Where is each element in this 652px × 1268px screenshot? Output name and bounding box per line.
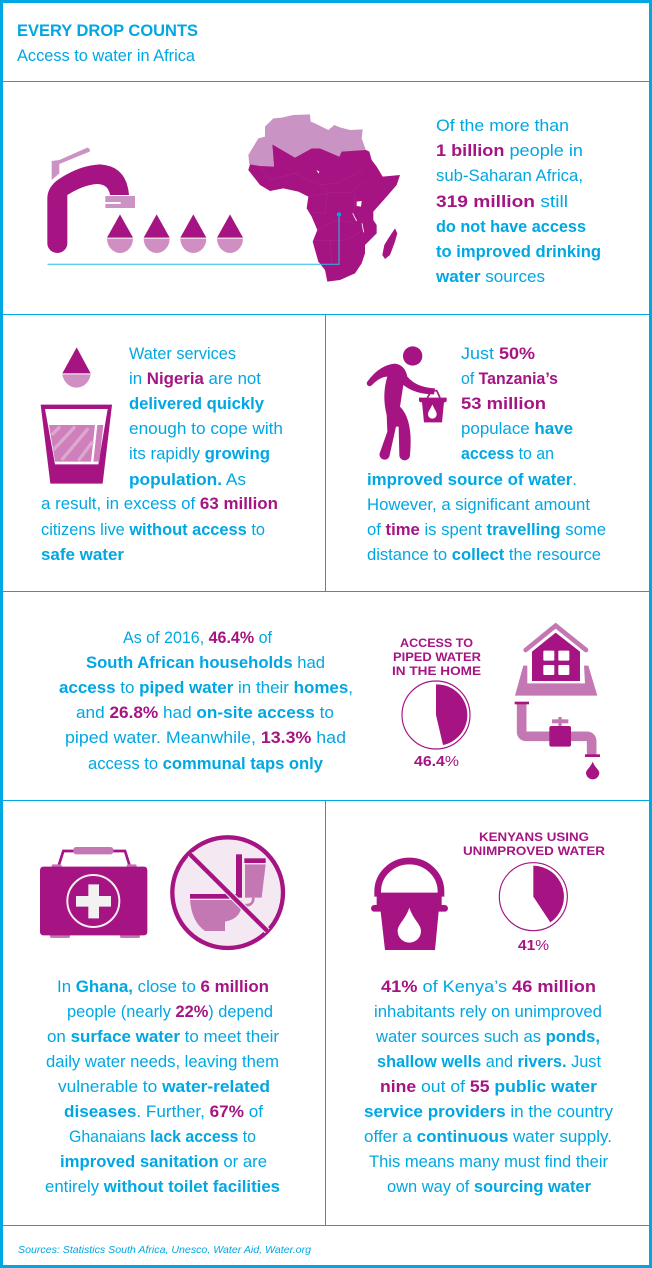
text block: South African households had [86,654,325,672]
text block [364,978,614,1196]
text block: entirely without toilet facilities [45,1178,280,1196]
panel: Ghana [40,837,283,1196]
text block: However, a significant amount [367,496,590,514]
text block: improved sanitation or are [60,1153,267,1171]
text block [367,345,606,564]
panel: South Africa [59,626,600,779]
icon: faucet and drops [47,148,243,253]
text block: This means many must find their [369,1153,609,1171]
text block: of Tanzania’s [461,370,558,388]
text block: piped water. Meanwhile, 13.3% had [65,729,346,747]
text block: water sources [435,268,545,286]
text block: service providers in the country [364,1103,614,1121]
chart value: 46.4% [414,754,459,770]
text block: Just 50% [461,345,535,363]
text block [435,117,601,286]
text block: and 26.8% had on-site access to [76,704,334,722]
panel: Kenya [364,830,614,1196]
text block: diseases. Further, 67% of [64,1103,263,1121]
text block: Ghanaians lack access to [69,1128,256,1146]
chart label: ACCESS TO [400,636,473,650]
text block: its rapidly growing [129,445,270,463]
text block: on surface water to meet their [47,1028,280,1046]
text block: enough to cope with [129,420,283,438]
text block: do not have access [436,218,586,236]
text block: access to communal taps only [88,755,324,773]
callout line [48,212,341,264]
text block: citizens live without access to [41,521,265,539]
pie chart: 41% [499,863,567,931]
text block: distance to collect the resource [367,546,601,564]
text block: populace have [461,420,573,438]
text block: water sources such as ponds, [375,1028,600,1046]
text block: shallow wells and rivers. Just [377,1053,601,1071]
text block: 1 billion people in [436,142,583,160]
subtitle: Access to water in Africa [17,47,196,65]
text block: access to piped water in their homes, [59,679,353,697]
text block: vulnerable to water-related [58,1078,270,1096]
map: Africa [248,114,400,282]
text block: people (nearly 22%) depend [67,1003,273,1021]
text block: nine out of 55 public water [380,1078,598,1096]
text block: sub-Saharan Africa, [436,167,583,185]
chart label: IN THE HOME [392,664,481,678]
title: EVERY DROP COUNTS [17,22,198,40]
text block [45,978,280,1196]
chart label [392,636,481,678]
pie chart: 46.4% [402,681,470,749]
text block: delivered quickly [129,395,265,413]
panel: Tanzania [367,345,606,564]
chart label: KENYANS USING [479,830,589,844]
text block: access to an [461,445,554,463]
text block: Of the more than [436,117,569,135]
text block: population. As [129,471,246,489]
chart label: PIPED WATER [393,650,481,664]
text block: improved source of water . [367,471,577,489]
text block: 53 million [461,395,546,413]
text block: In Ghana, close to 6 million [57,978,269,996]
text block: own way of sourcing water [387,1178,592,1196]
text block [41,345,283,564]
icon: person with bucket [367,346,447,460]
footer: sources: Sources: Statistics South Africa, Unesco, Water Aid, Water.org [18,1244,311,1256]
panel: Nigeria [41,345,283,564]
icon: bucket [371,861,448,950]
text block: to improved drinking [436,243,601,261]
icon: drop and glass [41,347,112,483]
icon: first aid kit [40,847,147,938]
chart label [463,830,605,858]
text block: 319 million still [436,193,568,211]
text block: of time is spent travelling some [367,521,606,539]
text block: safe water [41,546,125,564]
icon: house and tap [515,626,600,779]
text block: a result, in excess of 63 million [41,495,278,513]
chart label: UNIMPROVED WATER [463,844,605,858]
chart value: 41% [518,938,549,954]
panel: header [17,22,198,65]
panel: sub-Saharan Africa [47,114,601,286]
icon: no toilet [172,837,283,948]
text block: Water services [129,345,236,363]
text block: 41% of Kenya’s 46 million [381,978,596,996]
text block: offer a continuous water supply. [364,1128,612,1146]
text block: in Nigeria are not [129,370,261,388]
text block: As of 2016, 46.4% of [123,629,272,647]
text block: daily water needs, leaving them [46,1053,279,1071]
text block [59,629,353,773]
text block: inhabitants rely on unimproved [374,1003,602,1021]
